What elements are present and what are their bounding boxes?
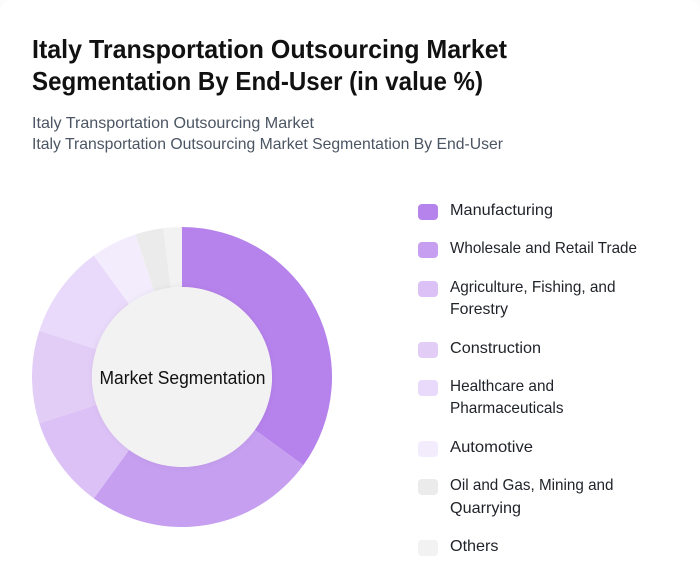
segment: Agriculture, Fishing, and Forestry [39, 405, 129, 498]
legend [418, 202, 637, 556]
legend item: Healthcare and Pharmaceuticals: Pharmaceuticals [450, 400, 564, 417]
legend item: Construction [418, 340, 541, 358]
segment: Construction [32, 331, 96, 423]
segment: Automotive [94, 234, 154, 304]
legend item: Wholesale and Retail Trade: Wholesale and Retail Trade [450, 240, 637, 257]
segment: Oil and Gas, Mining and Quarrying [136, 228, 171, 291]
subtitle: Italy Transportation Outsourcing Market [32, 115, 315, 132]
title: Segmentation By End-User (in value %) [32, 66, 483, 96]
donut centre [92, 287, 272, 467]
legend item: Automotive: Automotive [450, 439, 533, 456]
legend item: Construction: Construction [450, 340, 541, 357]
legend item: Oil and Gas, Mining and Quarrying: Quarrying [450, 500, 521, 517]
segment: Wholesale and Retail Trade [94, 430, 303, 527]
segment: Healthcare and Pharmaceuticals [39, 256, 129, 349]
legend item: Agriculture, Fishing, and Forestry: Agriculture, Fishing, and [450, 279, 616, 296]
legend item: Agriculture, Fishing, and Forestry [418, 279, 616, 318]
subtitle [32, 115, 504, 153]
legend item: Automotive [418, 439, 533, 457]
donut chart [32, 227, 332, 527]
title: Italy Transportation Outsourcing Market [32, 34, 507, 64]
subtitle: Italy Transportation Outsourcing Market Segmentation By End-User [32, 136, 504, 153]
legend item: Healthcare and Pharmaceuticals: Healthcare and [450, 378, 554, 395]
title [32, 34, 507, 96]
legend item: Healthcare and Pharmaceuticals [418, 378, 564, 417]
centre label: Market Segmentation [100, 368, 266, 388]
legend item: Others [418, 538, 498, 556]
legend item: Others: Others [450, 538, 498, 555]
legend item: Agriculture, Fishing, and Forestry: Forestry [450, 301, 508, 318]
segment: Others [163, 227, 182, 288]
legend item: Manufacturing: Manufacturing [450, 202, 553, 219]
legend item: Oil and Gas, Mining and Quarrying [418, 477, 614, 517]
legend item: Oil and Gas, Mining and Quarrying: Oil and Gas, Mining and [450, 477, 614, 494]
segment: Manufacturing [182, 227, 332, 465]
